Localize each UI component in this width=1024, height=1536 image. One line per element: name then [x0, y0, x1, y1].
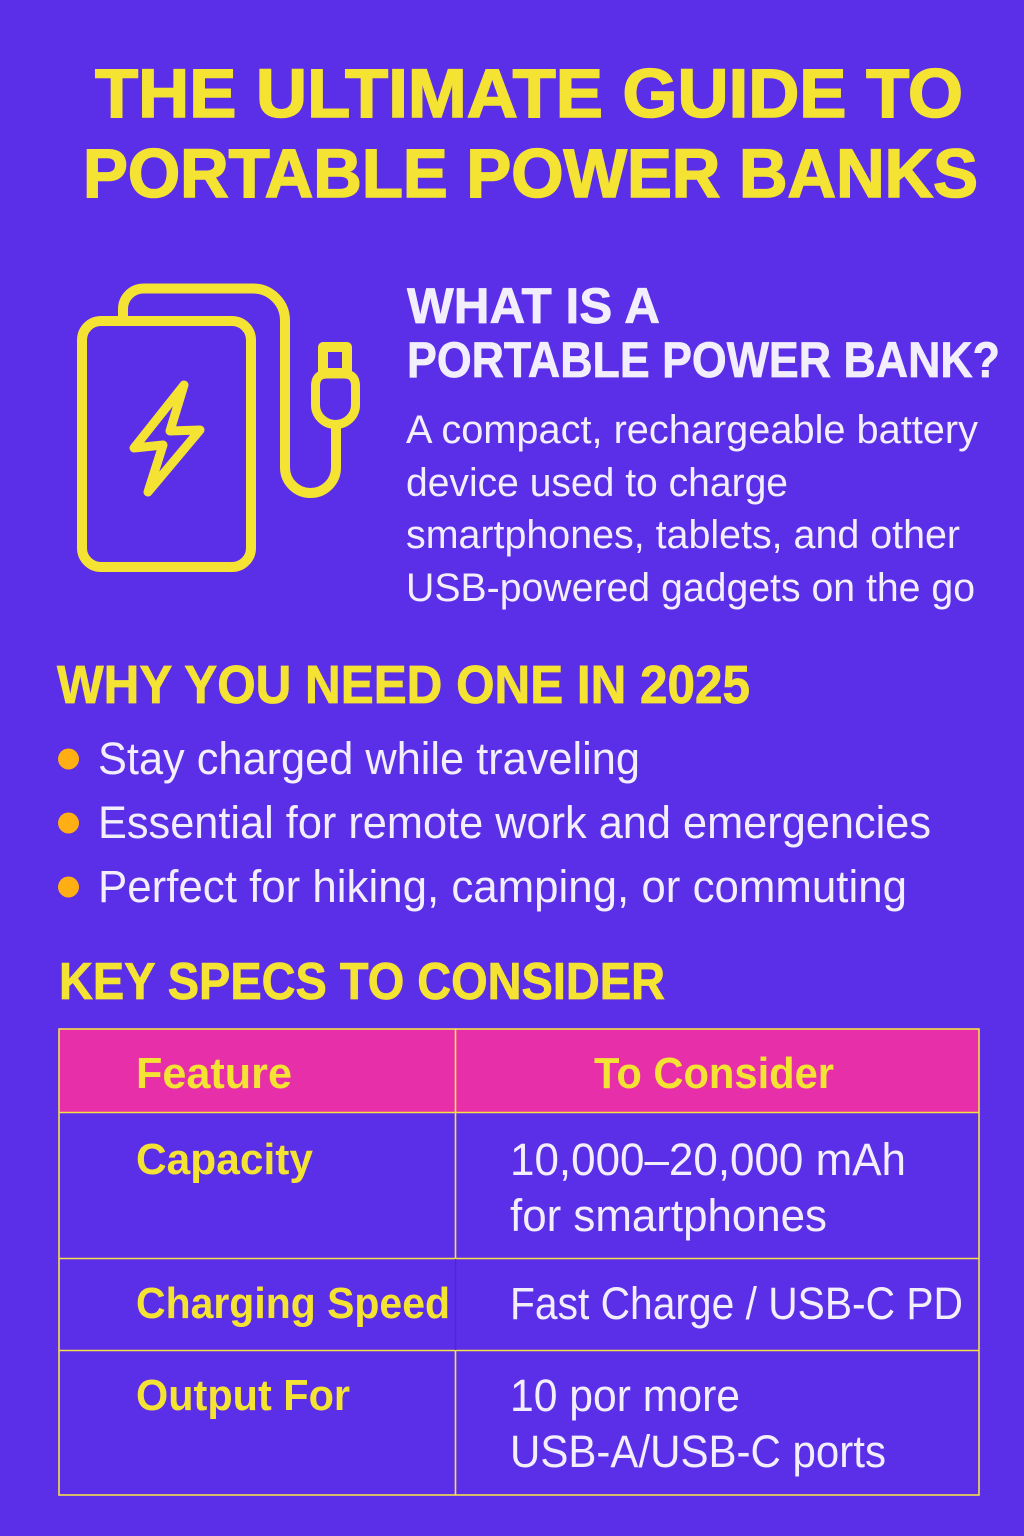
table: key specs: 10 por more: [510, 1370, 740, 1421]
text block: definition: [406, 408, 978, 610]
table: key specs: Fast Charge / USB-C PD: [510, 1278, 963, 1329]
text block: definition: smartphones, tablets, and other: [406, 513, 960, 557]
table: key specs: Charging Speed: [136, 1279, 450, 1328]
bullet list: reasons: Essential for remote work and emergencies: [98, 797, 931, 848]
table header row: [59, 1029, 979, 1112]
title: PORTABLE POWER BANKS: [83, 135, 978, 212]
text block: definition: device used to charge: [406, 461, 788, 505]
table: key specs: [59, 1029, 979, 1495]
bullet list: reasons: Perfect for hiking, camping, or commuting: [98, 861, 907, 912]
table: key specs: Output For: [136, 1371, 350, 1420]
text block: definition: USB-powered gadgets on the go: [406, 566, 975, 610]
bullet list: reasons: Stay charged while traveling: [98, 733, 640, 784]
heading: why you need one: WHY YOU NEED ONE IN 2025: [57, 655, 750, 715]
table: key specs: Capacity: [136, 1135, 314, 1184]
title: [83, 55, 978, 212]
title: THE ULTIMATE GUIDE TO: [95, 55, 963, 132]
bullet list: reasons: [58, 733, 931, 912]
table: key specs: 10,000–20,000 mAh: [510, 1134, 906, 1185]
heading: what is a portable power bank: [407, 278, 1000, 388]
heading: key specs: KEY SPECS TO CONSIDER: [59, 953, 665, 1011]
heading: what is a portable power bank: WHAT IS A: [407, 278, 660, 334]
table: key specs: Feature: [136, 1049, 292, 1098]
text block: definition: A compact, rechargeable battery: [406, 408, 978, 452]
table: key specs: USB-A/USB-C ports: [510, 1426, 886, 1477]
table: key specs: for smartphones: [510, 1190, 827, 1241]
table: key specs: To Consider: [594, 1049, 834, 1098]
icon: power bank with USB cable: [82, 288, 356, 567]
